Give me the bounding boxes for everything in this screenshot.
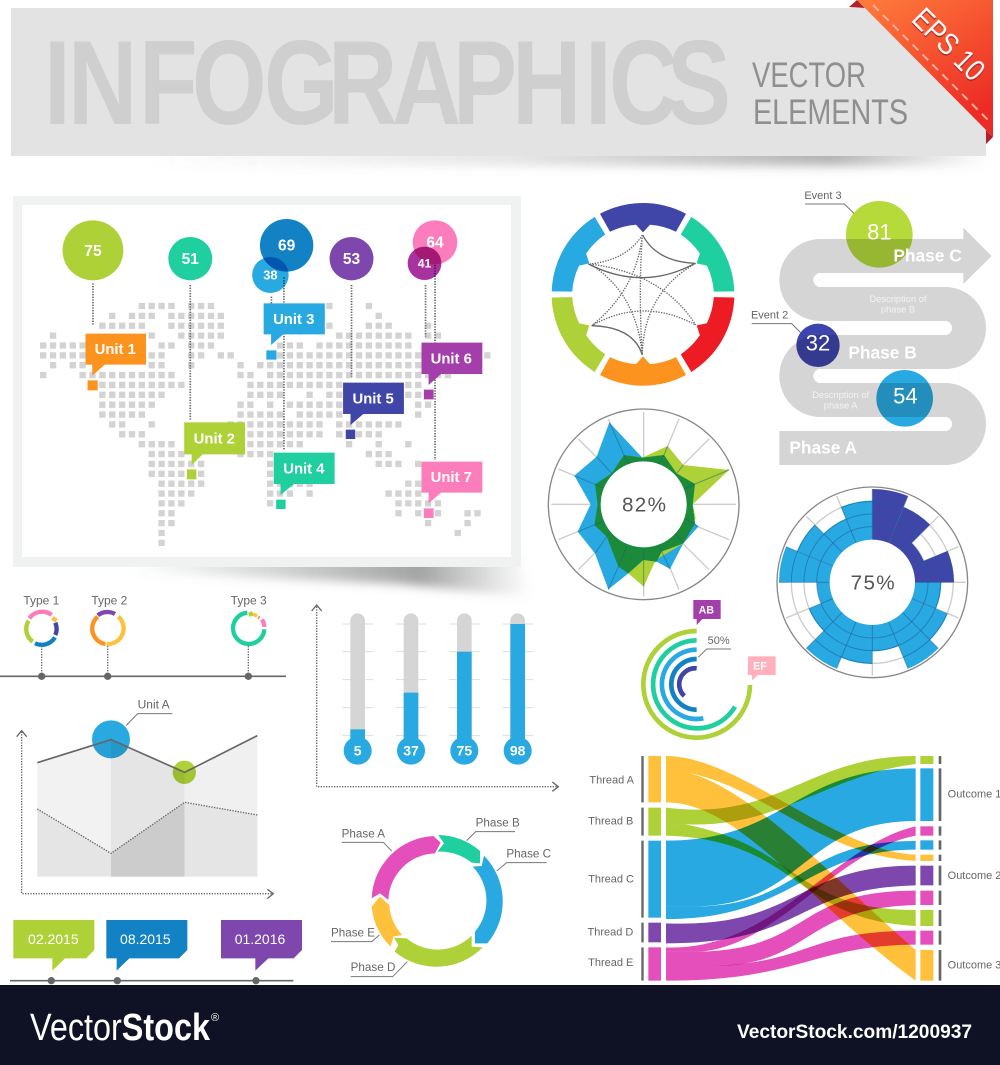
outcome labels: Outcome 2	[948, 870, 1000, 882]
radial value: 75%	[851, 571, 896, 594]
title: INFOGRAPHICS	[44, 17, 731, 151]
bubbles: 38	[263, 267, 278, 282]
unit tags	[86, 303, 482, 518]
area chart	[17, 698, 273, 899]
thermometer values	[354, 743, 526, 759]
date tags timeline: 08.2015	[120, 931, 171, 947]
AB tag: AB	[699, 605, 714, 617]
phase cycle ring	[331, 817, 551, 977]
bubbles: 41	[418, 256, 432, 270]
phase descriptions: phase A	[824, 400, 858, 410]
EF tag: EF	[753, 660, 767, 672]
bubbles: 75	[84, 243, 102, 260]
date tags timeline: 02.2015	[28, 931, 79, 947]
footer logo: VectorStock	[30, 1007, 211, 1049]
outcome labels: Outcome 1	[948, 788, 1000, 800]
serpentine phases	[751, 190, 992, 457]
type donut timeline: Type 1	[23, 593, 60, 607]
corner ribbon	[849, 0, 993, 144]
thermometer values: 5	[354, 743, 362, 759]
bubbles: 69	[278, 238, 296, 255]
circle values: 81	[867, 219, 892, 244]
circle values	[806, 219, 918, 408]
label: Unit A	[126, 698, 172, 726]
radar value: 82%	[622, 494, 667, 517]
phase text: Phase B	[848, 342, 917, 362]
phase descriptions: phase B	[881, 304, 915, 314]
footer registered mark: ®	[211, 1012, 219, 1024]
phase labels	[331, 817, 551, 974]
unit tags: Unit 6	[431, 351, 472, 367]
bubbles: 64	[426, 234, 444, 251]
type donut timeline	[0, 593, 286, 680]
50% label: 50%	[708, 635, 730, 647]
type donut timeline: Type 3	[231, 593, 267, 607]
event labels: Event 3	[804, 190, 842, 202]
chords	[588, 235, 696, 355]
donut: type 2	[92, 612, 124, 644]
type donut timeline: Type 2	[91, 593, 128, 607]
thread labels: Thread B	[588, 815, 633, 827]
event labels: Event 2	[751, 309, 788, 321]
event circles	[796, 201, 933, 427]
unit tags: Unit 2	[194, 431, 235, 447]
donut: type 3	[233, 612, 264, 644]
phase labels: Phase A	[342, 827, 385, 840]
subtitle	[752, 56, 908, 132]
thermometer values: 98	[510, 743, 526, 759]
thermometer values: 75	[457, 743, 472, 759]
sankey diagram	[588, 756, 1000, 981]
phase labels: Phase D	[351, 961, 395, 974]
phase descriptions: Description of	[812, 390, 870, 400]
unit tags: Unit 1	[95, 342, 136, 358]
phase descriptions	[812, 294, 927, 410]
thread labels	[588, 774, 635, 969]
panel: world map	[13, 196, 532, 597]
event labels	[751, 190, 842, 321]
outcome labels: Outcome 3	[948, 959, 1000, 971]
phase labels: Phase C	[506, 847, 551, 860]
phase text: Phase C	[893, 246, 962, 266]
label: Unit A: Unit A	[138, 698, 170, 712]
phase labels: Phase E	[331, 927, 375, 940]
left bars	[641, 756, 661, 981]
thermometer values: 37	[403, 743, 419, 759]
unit tags: Unit 3	[273, 312, 314, 328]
thermometer bars	[312, 605, 558, 791]
chord ring chart	[542, 203, 744, 386]
thread labels: Thread E	[588, 957, 633, 969]
header banner	[11, 0, 993, 166]
right bars	[920, 756, 941, 981]
circle values: 54	[893, 383, 918, 408]
thread labels: Thread C	[588, 873, 634, 885]
bubbles	[63, 219, 457, 293]
footer image id: VectorStock.com/1200937	[737, 1022, 972, 1043]
donut: type 1	[26, 612, 57, 645]
unit tags: Unit 4	[283, 461, 325, 477]
phase text: Phase A	[789, 437, 858, 457]
phase labels: Phase B	[476, 817, 520, 830]
outcome labels	[948, 788, 1000, 971]
thread labels: Thread A	[589, 774, 635, 786]
bubbles: 53	[343, 251, 361, 268]
unit tags: Unit 5	[353, 391, 394, 407]
circle values: 32	[806, 331, 830, 356]
map dot grid	[40, 306, 494, 543]
flows	[666, 756, 916, 981]
phase text	[789, 246, 962, 457]
date tags timeline: 01.2016	[235, 931, 285, 947]
concentric arc chart	[643, 600, 776, 738]
radial bar chart 75%	[777, 487, 968, 678]
thread labels: Thread D	[588, 927, 633, 939]
bubbles: 51	[182, 251, 199, 268]
radar chart 82%	[548, 409, 739, 600]
subtitle: ELEMENTS	[753, 93, 908, 132]
map markers and labels	[63, 219, 482, 518]
subtitle: VECTOR	[752, 56, 866, 95]
date tags timeline	[10, 920, 302, 984]
footer bar	[0, 985, 1000, 1065]
phase descriptions: Description of	[869, 294, 927, 304]
unit tags: Unit 7	[431, 470, 472, 486]
